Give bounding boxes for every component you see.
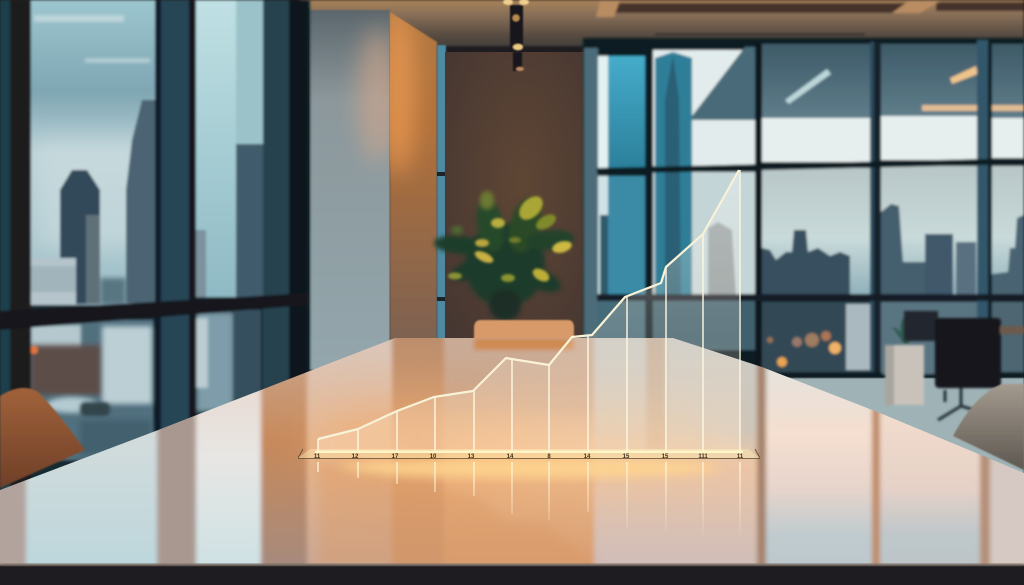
chart axis labels: 11 bbox=[314, 454, 321, 460]
table: reflection stripes bbox=[0, 330, 1024, 570]
skyline view: upper left pane bbox=[30, 0, 155, 305]
chart axis labels: 14 bbox=[584, 454, 591, 460]
glass line chart bbox=[298, 170, 760, 460]
table front edge bbox=[0, 565, 1024, 585]
table bbox=[0, 338, 1024, 566]
table: warm glow bbox=[310, 405, 550, 485]
plant bbox=[433, 191, 575, 321]
left brown chair bbox=[0, 388, 85, 488]
chart axis labels: 14 bbox=[507, 454, 514, 460]
chart drop lines bbox=[318, 170, 740, 452]
chair back behind table bbox=[474, 320, 574, 345]
chart trend line bbox=[318, 170, 739, 439]
pane: far right column bbox=[992, 44, 1024, 372]
chart axis labels: 13 bbox=[468, 454, 475, 460]
city lights bokeh bbox=[767, 331, 841, 367]
pane: right column bbox=[881, 44, 981, 374]
chart axis labels: 17 bbox=[392, 454, 399, 460]
plant pot, right bbox=[885, 317, 924, 405]
left window wall bbox=[0, 0, 310, 500]
ceiling bbox=[300, 0, 1024, 46]
floor bbox=[740, 378, 1024, 488]
mullions bbox=[597, 40, 1024, 379]
chart axis labels: 15 bbox=[662, 454, 669, 460]
window frames bbox=[0, 0, 308, 490]
ceiling spotlight bbox=[503, 0, 529, 71]
chart base axis bbox=[298, 449, 760, 458]
chart axis labels: 12 bbox=[352, 454, 359, 460]
office chairs bbox=[904, 311, 1024, 420]
chart axis labels bbox=[314, 454, 744, 460]
skyline view: upper middle pane bbox=[196, 0, 263, 297]
table: chart reflection bbox=[318, 462, 740, 565]
right window wall bbox=[583, 38, 1024, 380]
chart axis labels: 15 bbox=[623, 454, 630, 460]
right grey chair bbox=[953, 384, 1024, 470]
pane: blue tower left bbox=[584, 48, 645, 348]
chart area fill bbox=[318, 170, 739, 452]
pane: middle column bbox=[762, 44, 872, 374]
pane: glass tower and canopy bbox=[653, 47, 755, 350]
chart axis labels: 10 bbox=[430, 454, 437, 460]
plant: dark foliage bbox=[433, 191, 575, 321]
chart axis labels: 11 bbox=[737, 454, 744, 460]
chart axis labels: 111 bbox=[698, 454, 708, 460]
back wall bbox=[300, 5, 585, 388]
lower window panes bbox=[30, 310, 261, 460]
plant: yellow leaves bbox=[448, 192, 573, 284]
chart axis labels: 8 bbox=[547, 454, 551, 460]
